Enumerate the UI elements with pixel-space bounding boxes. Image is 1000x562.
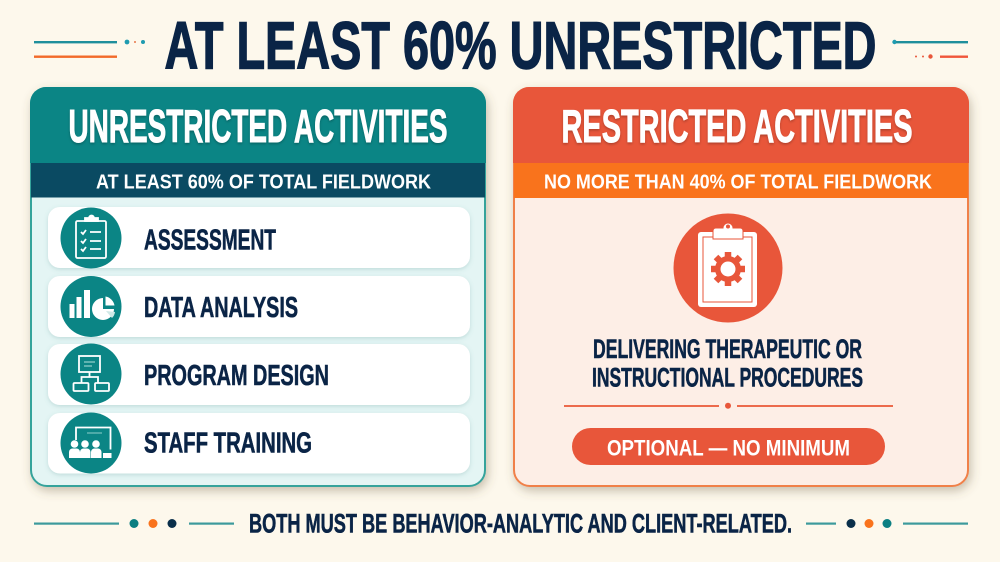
label: data analysis: DATA ANALYSIS	[144, 292, 298, 324]
heading: unrestricted activities: UNRESTRICTED ACTIVITIES	[68, 100, 448, 152]
icon: trainees at board	[69, 428, 112, 458]
footer ornament: left	[34, 519, 234, 528]
band: no more than 40%: NO MORE THAN 40% OF TOTAL FIELDWORK	[544, 172, 932, 194]
icon: flow chart	[74, 356, 109, 391]
title ornament: left	[34, 40, 145, 58]
text: delivering procedures	[592, 334, 863, 392]
text: delivering procedures: INSTRUCTIONAL PROCEDURES	[592, 362, 863, 392]
title ornament: right	[892, 40, 968, 59]
icon: bars and pie	[70, 290, 115, 320]
row: program design	[48, 344, 470, 405]
row: assessment	[48, 207, 470, 268]
icon: checklist clipboard	[76, 216, 106, 258]
pill: optional, no minimum	[572, 428, 885, 465]
band: at least 60%	[31, 163, 485, 198]
panel: restricted activities	[513, 87, 969, 486]
label: assessment: ASSESSMENT	[144, 224, 276, 256]
panel header: restricted	[513, 87, 969, 163]
band: no more than 40%	[514, 163, 968, 198]
label: program design: PROGRAM DESIGN	[144, 360, 329, 392]
label: staff training: STAFF TRAINING	[144, 428, 312, 460]
panel: unrestricted activities	[30, 87, 486, 486]
row: data analysis	[48, 276, 470, 337]
band: at least 60%: AT LEAST 60% OF TOTAL FIELDWORK	[96, 172, 431, 194]
panel header: unrestricted	[30, 87, 486, 163]
footer ornament: right	[806, 519, 968, 528]
text: delivering procedures: DELIVERING THERAPEUTIC OR	[593, 334, 862, 364]
pill: optional, no minimum: OPTIONAL — NO MINIMUM	[607, 436, 850, 460]
icon: clipboard with gear	[674, 214, 782, 322]
row: staff training	[48, 412, 470, 474]
